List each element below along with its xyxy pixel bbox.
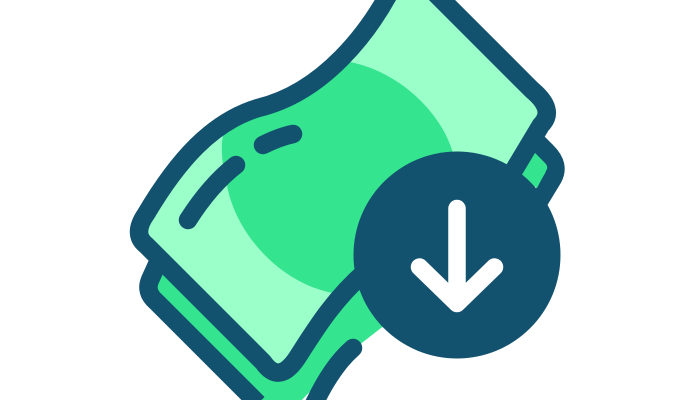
icon: banknotes with download badge: [130, 0, 565, 400]
back note outline bottom stroke: [314, 348, 353, 400]
back note window: [522, 153, 547, 188]
back note outline left: [148, 258, 258, 400]
dash highlight upper: [263, 134, 293, 145]
back note fill: [150, 150, 555, 400]
front note central circle: [222, 62, 470, 293]
badge circle: [354, 152, 560, 358]
front note fill: [139, 0, 547, 373]
dash highlight lower: [188, 165, 236, 220]
down arrow: [420, 208, 494, 304]
back banknote: [148, 133, 555, 400]
front note outline: [139, 0, 547, 373]
download badge: [354, 152, 560, 358]
front banknote: [139, 0, 547, 373]
back note outline right: [528, 133, 555, 216]
